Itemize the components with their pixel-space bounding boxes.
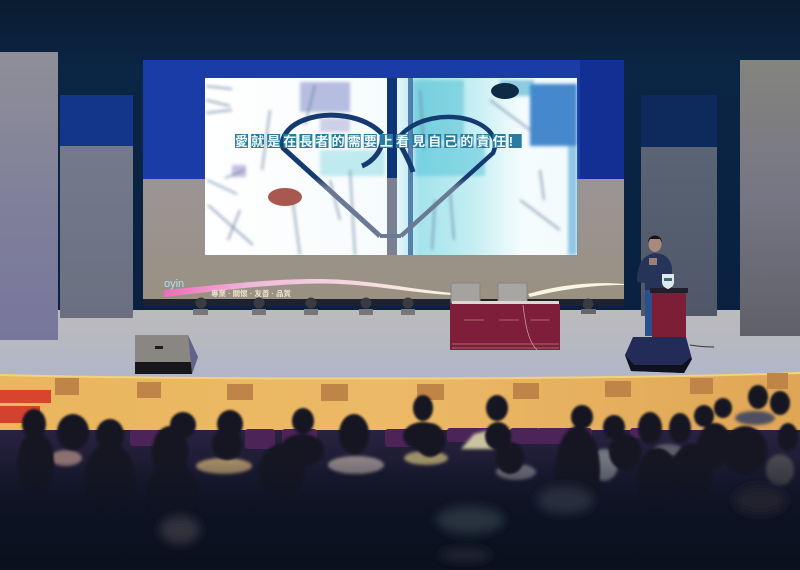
central dark post [387, 78, 397, 178]
foreground dark shading [0, 460, 800, 570]
screen slogan: 專業 · 關懷 · 友善 · 品質 [211, 288, 291, 298]
dark leaf mark [491, 83, 519, 99]
audience seating [0, 428, 800, 570]
light clothing highlights [50, 411, 794, 486]
head table [450, 283, 560, 350]
dim foreground shoulders [160, 486, 786, 561]
screen slide picture [205, 78, 577, 255]
audience members [0, 385, 800, 570]
slide caption: 愛就是在長者的需要上看見自己的責任! [235, 134, 516, 149]
ribbon swoosh [164, 279, 624, 297]
right floor monitor speaker [625, 337, 714, 373]
screen logo: oyin [164, 278, 184, 290]
red steps [0, 390, 51, 423]
podium [652, 291, 686, 337]
LED screen [143, 60, 624, 306]
crack lines [206, 85, 560, 255]
name plates [451, 283, 480, 303]
stage floor [0, 310, 800, 382]
heads and hair [18, 385, 798, 529]
left floor monitor speaker [135, 335, 198, 374]
stage front panel [0, 372, 800, 440]
heart outline [282, 115, 495, 236]
back wall and ceiling [0, 0, 800, 340]
left stage pillars [0, 52, 133, 340]
stage lights row [193, 298, 596, 315]
lips [268, 188, 302, 206]
podium emblem [662, 274, 674, 289]
speaker at podium [637, 236, 688, 337]
right stage pillars [641, 60, 800, 336]
